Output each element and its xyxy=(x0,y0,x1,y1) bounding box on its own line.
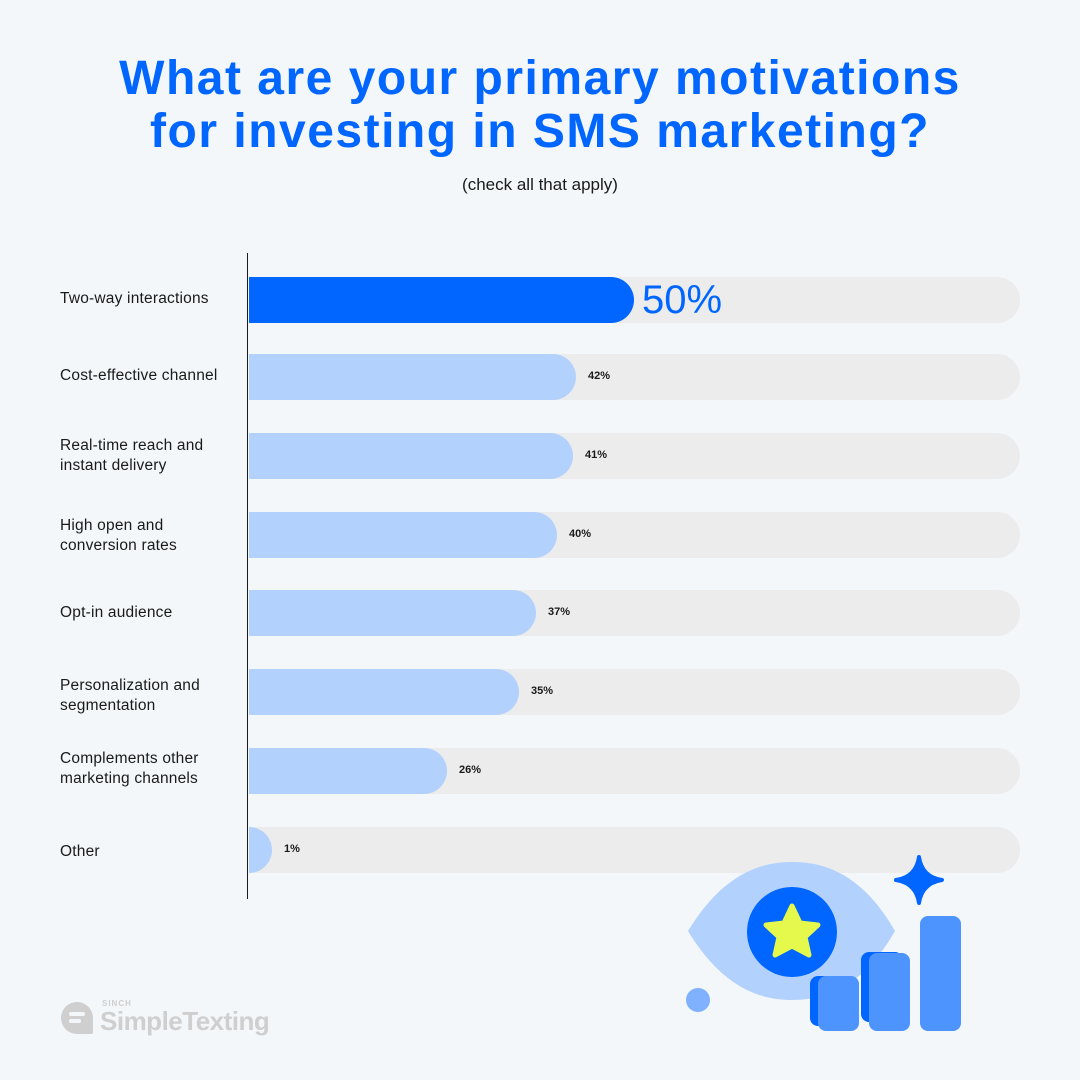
bar: 50%: 50% xyxy=(642,278,722,322)
bar: 41% xyxy=(249,433,1020,479)
label: Complements: marketing channels xyxy=(60,770,198,787)
illustration: eye with star and bars xyxy=(686,855,961,1031)
label: Personalization: Personalization and xyxy=(60,677,200,694)
title: What are your primary motivations xyxy=(119,52,961,105)
logo: SINCH xyxy=(102,999,132,1008)
label: Real-time reach: instant delivery xyxy=(60,457,167,474)
bar: 1% xyxy=(249,827,1020,873)
bar: 42% xyxy=(249,354,1020,400)
axis line xyxy=(247,253,248,899)
label: Cost-effective channel: Cost-effective channel xyxy=(60,367,217,384)
title xyxy=(119,52,961,158)
label: Other: Other xyxy=(60,843,100,860)
label: Complements: Complements other xyxy=(60,750,199,767)
label: Real-time reach: Real-time reach and xyxy=(60,437,203,454)
bar: 35% xyxy=(249,669,1020,715)
title: for investing in SMS marketing? xyxy=(150,105,930,158)
bar: 42%: 42% xyxy=(588,370,610,382)
bar chart xyxy=(60,277,1020,873)
bar: 37% xyxy=(249,590,1020,636)
label: High open: conversion rates xyxy=(60,537,177,554)
bar: 50% xyxy=(249,277,1020,323)
label: High open xyxy=(60,517,177,554)
bar: 26%: 26% xyxy=(459,764,481,776)
bar: 1%: 1% xyxy=(284,843,300,855)
label: Complements xyxy=(60,750,199,787)
logo xyxy=(61,999,269,1036)
label: Personalization xyxy=(60,677,200,714)
bar: 26% xyxy=(249,748,1020,794)
label: Personalization: segmentation xyxy=(60,697,155,714)
logo: SimpleTexting xyxy=(100,1006,269,1036)
bar: 35%: 35% xyxy=(531,685,553,697)
label: Real-time reach xyxy=(60,437,203,474)
bar: 40%: 40% xyxy=(569,528,591,540)
label: Two-way interactions: Two-way interactions xyxy=(60,290,209,307)
bar: 37%: 37% xyxy=(548,606,570,618)
subtitle: (check all that apply) xyxy=(462,175,618,194)
bar: 41%: 41% xyxy=(585,449,607,461)
label: Opt-in audience: Opt-in audience xyxy=(60,604,172,621)
label: High open: High open and xyxy=(60,517,163,534)
bar: 40% xyxy=(249,512,1020,558)
